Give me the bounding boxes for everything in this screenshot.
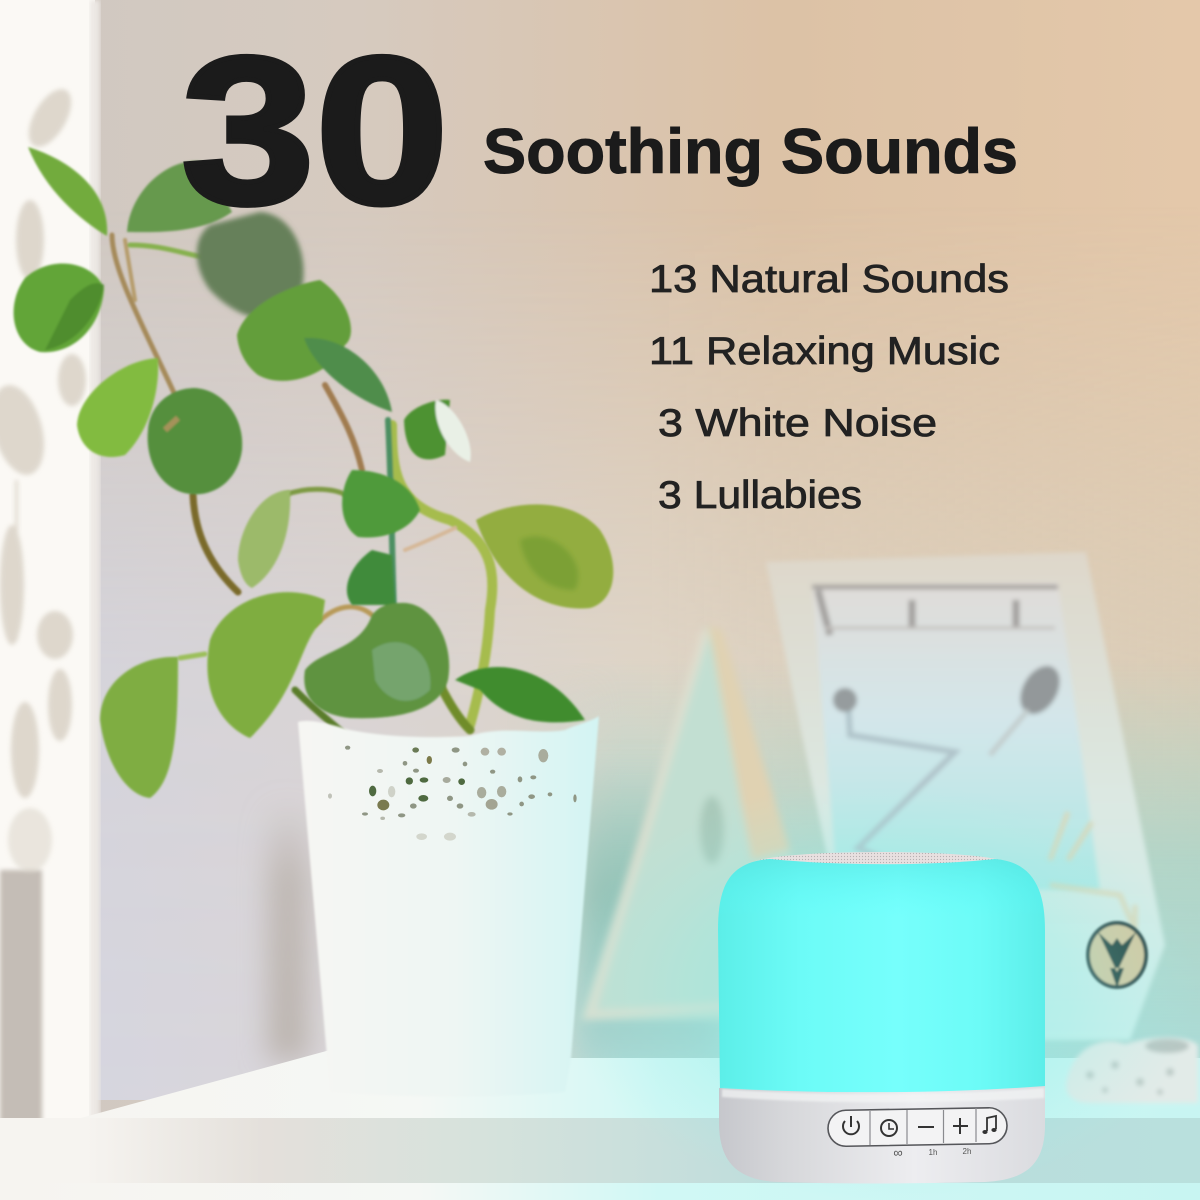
lace holes [328, 746, 577, 841]
control panel [828, 1107, 1007, 1147]
sea urchin shell [1066, 1037, 1198, 1103]
teal lamp light wash [570, 698, 1200, 1058]
timer labels: ∞ [893, 1145, 903, 1160]
white shelf [0, 1050, 1200, 1200]
plant [14, 147, 613, 798]
shelf front face [0, 1118, 1200, 1183]
sound categories list: 11 Relaxing Music [649, 330, 1000, 373]
lace flower pot [298, 716, 599, 1096]
sound categories list: 3 White Noise [658, 402, 937, 445]
icon: clock [881, 1120, 897, 1136]
icon: power [843, 1116, 859, 1134]
glowing cyan body [718, 859, 1045, 1092]
deer medallion [1086, 921, 1148, 989]
plant leaves [14, 147, 613, 798]
timer labels [893, 1145, 971, 1160]
icon: plus [953, 1118, 968, 1134]
grey base [719, 1086, 1045, 1184]
plant stems [112, 235, 492, 735]
sound categories list [649, 258, 1009, 517]
dried flower decoration [1050, 812, 1135, 930]
night light speaker [718, 852, 1045, 1184]
lamp glow [560, 780, 1200, 1200]
timer labels: 1h [929, 1148, 937, 1157]
headline number: 30 [181, 13, 449, 248]
blurred picture frame [766, 552, 1165, 1040]
sound categories list: 13 Natural Sounds [649, 258, 1009, 301]
timer labels: 2h [963, 1147, 971, 1156]
pot body [298, 716, 599, 1096]
blurred triangle ornament [580, 625, 800, 1020]
sunlit wall strip with leaf shadows [0, 0, 100, 1200]
speaker mesh top [752, 852, 1008, 876]
headline text: Soothing Sounds [483, 117, 1018, 187]
icon: music note [982, 1116, 997, 1134]
icon: minus [918, 1126, 934, 1128]
sound categories list: 3 Lullabies [658, 474, 862, 517]
